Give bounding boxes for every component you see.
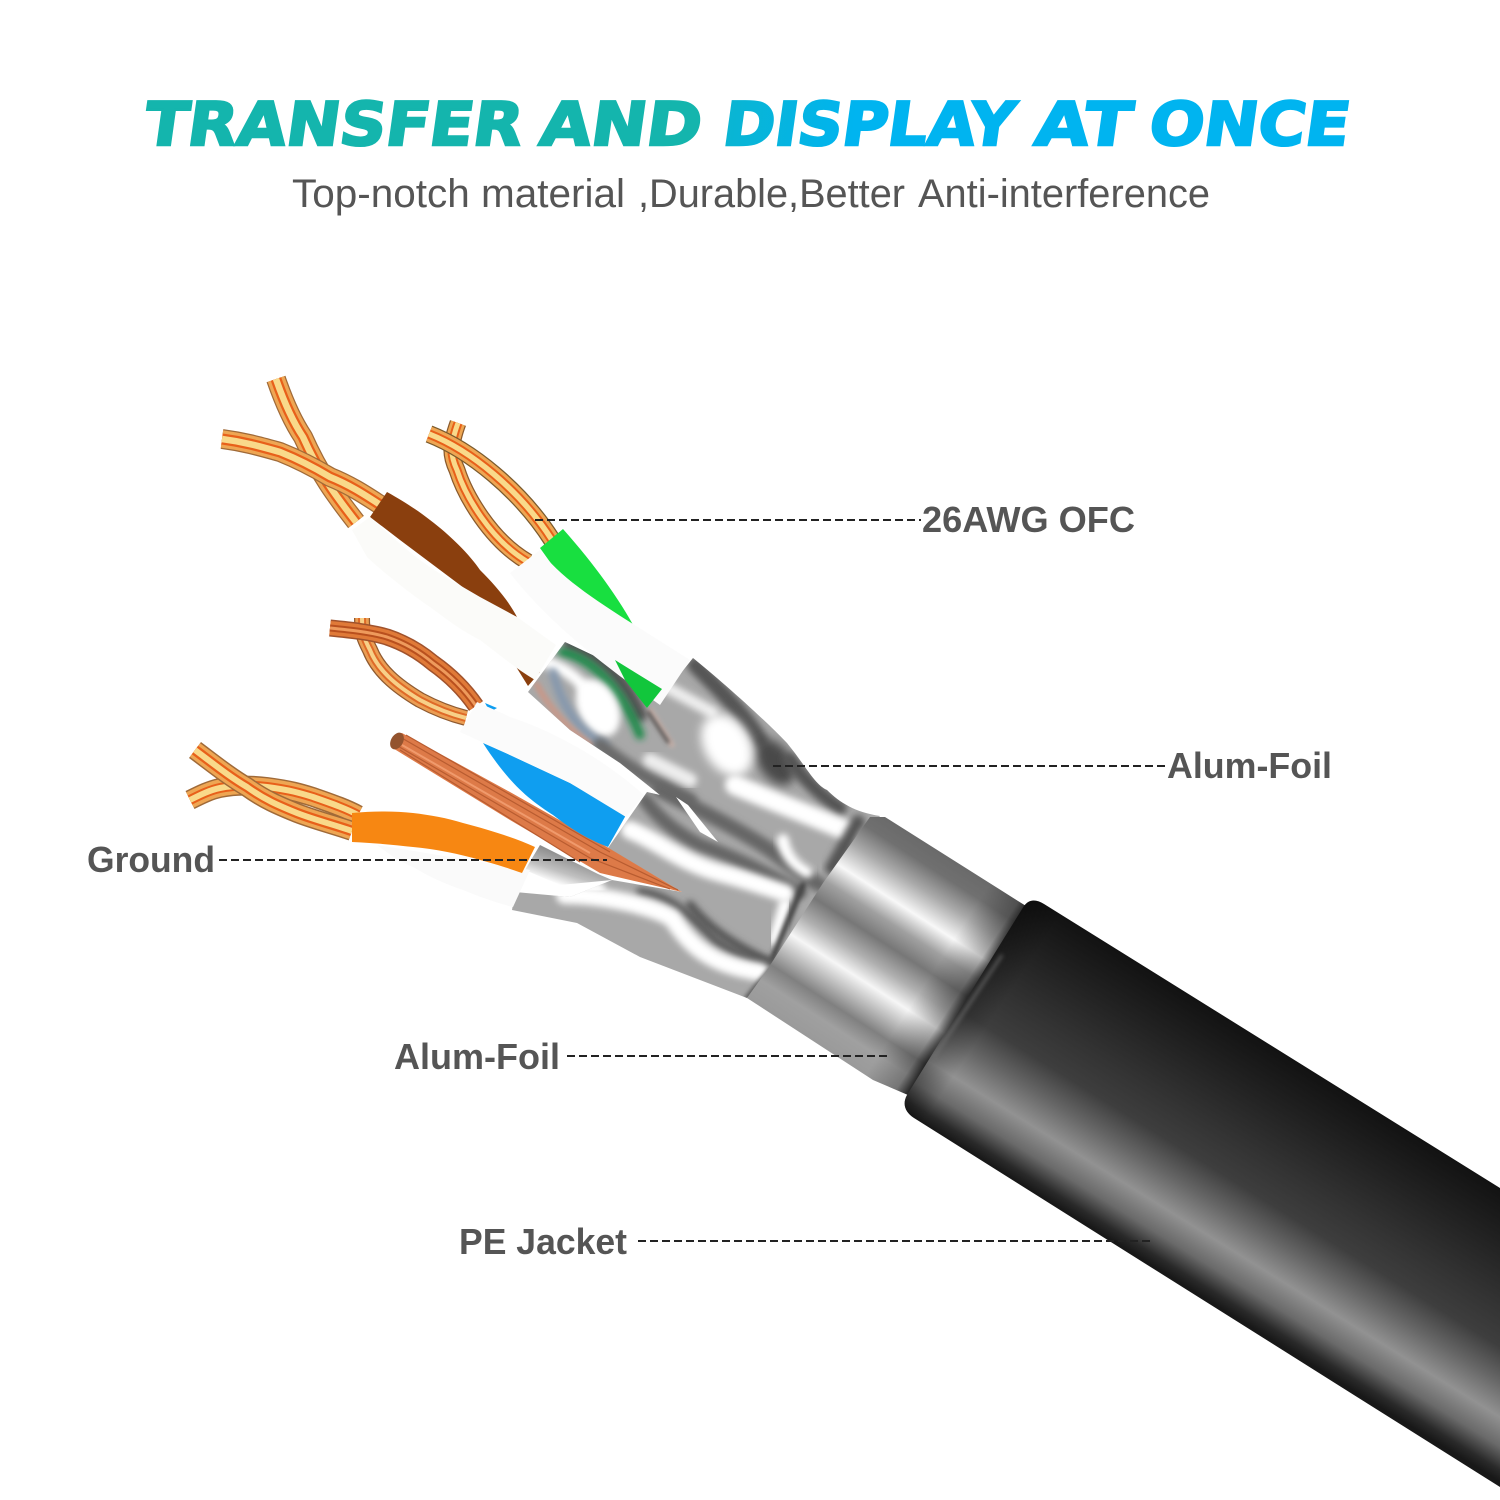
orange pair shield shading — [530, 882, 772, 998]
white insulation — [510, 550, 690, 705]
copper strands — [429, 423, 552, 562]
wire pair: brown and white — [222, 379, 556, 686]
title — [140, 90, 1355, 160]
white insulation — [460, 702, 644, 817]
wire pair: orange and white — [190, 750, 535, 907]
title: TRANSFER — [140, 90, 528, 160]
copper strands — [190, 750, 358, 831]
wire pair: blue and white — [330, 618, 644, 847]
blue pair shield shading — [630, 800, 803, 962]
green insulation lower — [615, 660, 662, 708]
callout: Alum-Foil lower: Alum-Foil — [394, 1036, 560, 1077]
white insulation — [377, 845, 530, 907]
title: AND — [536, 90, 707, 160]
wire pair: green and white — [429, 423, 690, 708]
brown insulation — [370, 492, 517, 617]
foil shields — [512, 642, 880, 998]
green pair shield shading — [648, 665, 858, 868]
subtitle: Top-notch material — [292, 172, 625, 216]
PE jacket — [905, 900, 1500, 1487]
subtitle: Anti-interference — [918, 172, 1210, 216]
metal braid sleeve — [747, 817, 1026, 1095]
green insulation — [540, 529, 637, 632]
callout: Alum-Foil upper: Alum-Foil — [1167, 745, 1332, 786]
callout: 26AWG OFC: 26AWG OFC — [922, 499, 1135, 540]
cable illustration — [190, 379, 1500, 1487]
callout: Ground: Ground — [87, 839, 215, 880]
callout: PE Jacket: PE Jacket — [459, 1221, 627, 1262]
bare ground wire — [387, 730, 682, 892]
foil gap — [676, 797, 718, 842]
white insulation — [352, 517, 556, 680]
orange shield collar — [525, 845, 612, 885]
subtitle: ,Durable,Better — [638, 172, 905, 216]
brown pair shield shading — [537, 645, 690, 800]
title: DISPLAY — [719, 90, 1021, 160]
orange insulation — [352, 812, 535, 873]
title: ONCE — [1145, 90, 1355, 160]
copper strands — [222, 379, 382, 522]
blue insulation — [483, 743, 626, 847]
title: AT — [1031, 90, 1137, 160]
subtitle — [292, 172, 1210, 216]
middle shading — [660, 790, 820, 885]
copper strands — [330, 618, 476, 718]
